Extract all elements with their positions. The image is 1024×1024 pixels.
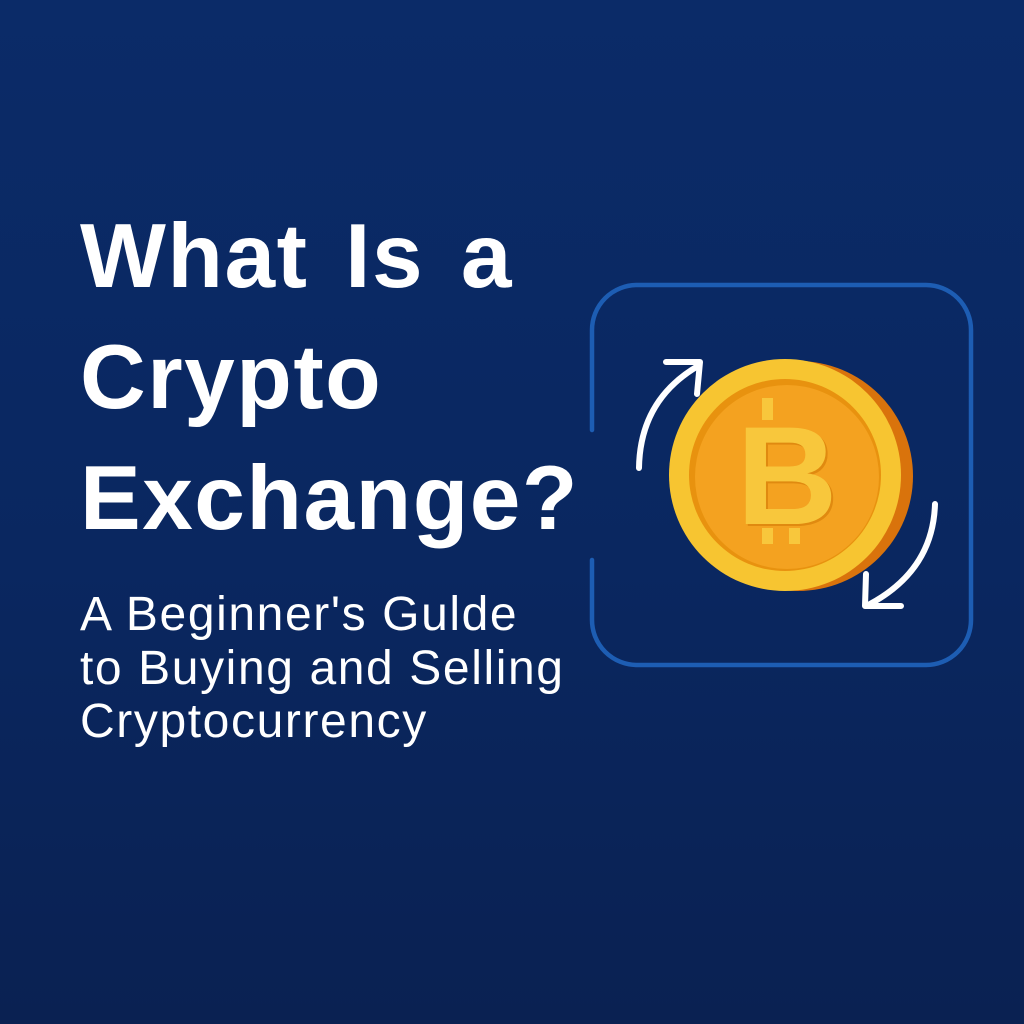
frame xyxy=(592,285,971,665)
title: What Is a xyxy=(80,206,513,307)
subtitle: A Beginner's Gulde xyxy=(80,588,518,641)
arrow: top-left xyxy=(639,362,700,468)
coin: B xyxy=(736,397,838,554)
subtitle xyxy=(80,588,565,748)
coin xyxy=(669,359,913,591)
arrow: bottom-right xyxy=(865,504,935,606)
subtitle: Cryptocurrency xyxy=(80,695,428,748)
coin: B xyxy=(738,399,840,556)
title: Crypto xyxy=(80,327,382,428)
subtitle: to Buying and Selling xyxy=(80,642,565,694)
title: Exchange? xyxy=(80,448,579,549)
title xyxy=(80,206,579,549)
